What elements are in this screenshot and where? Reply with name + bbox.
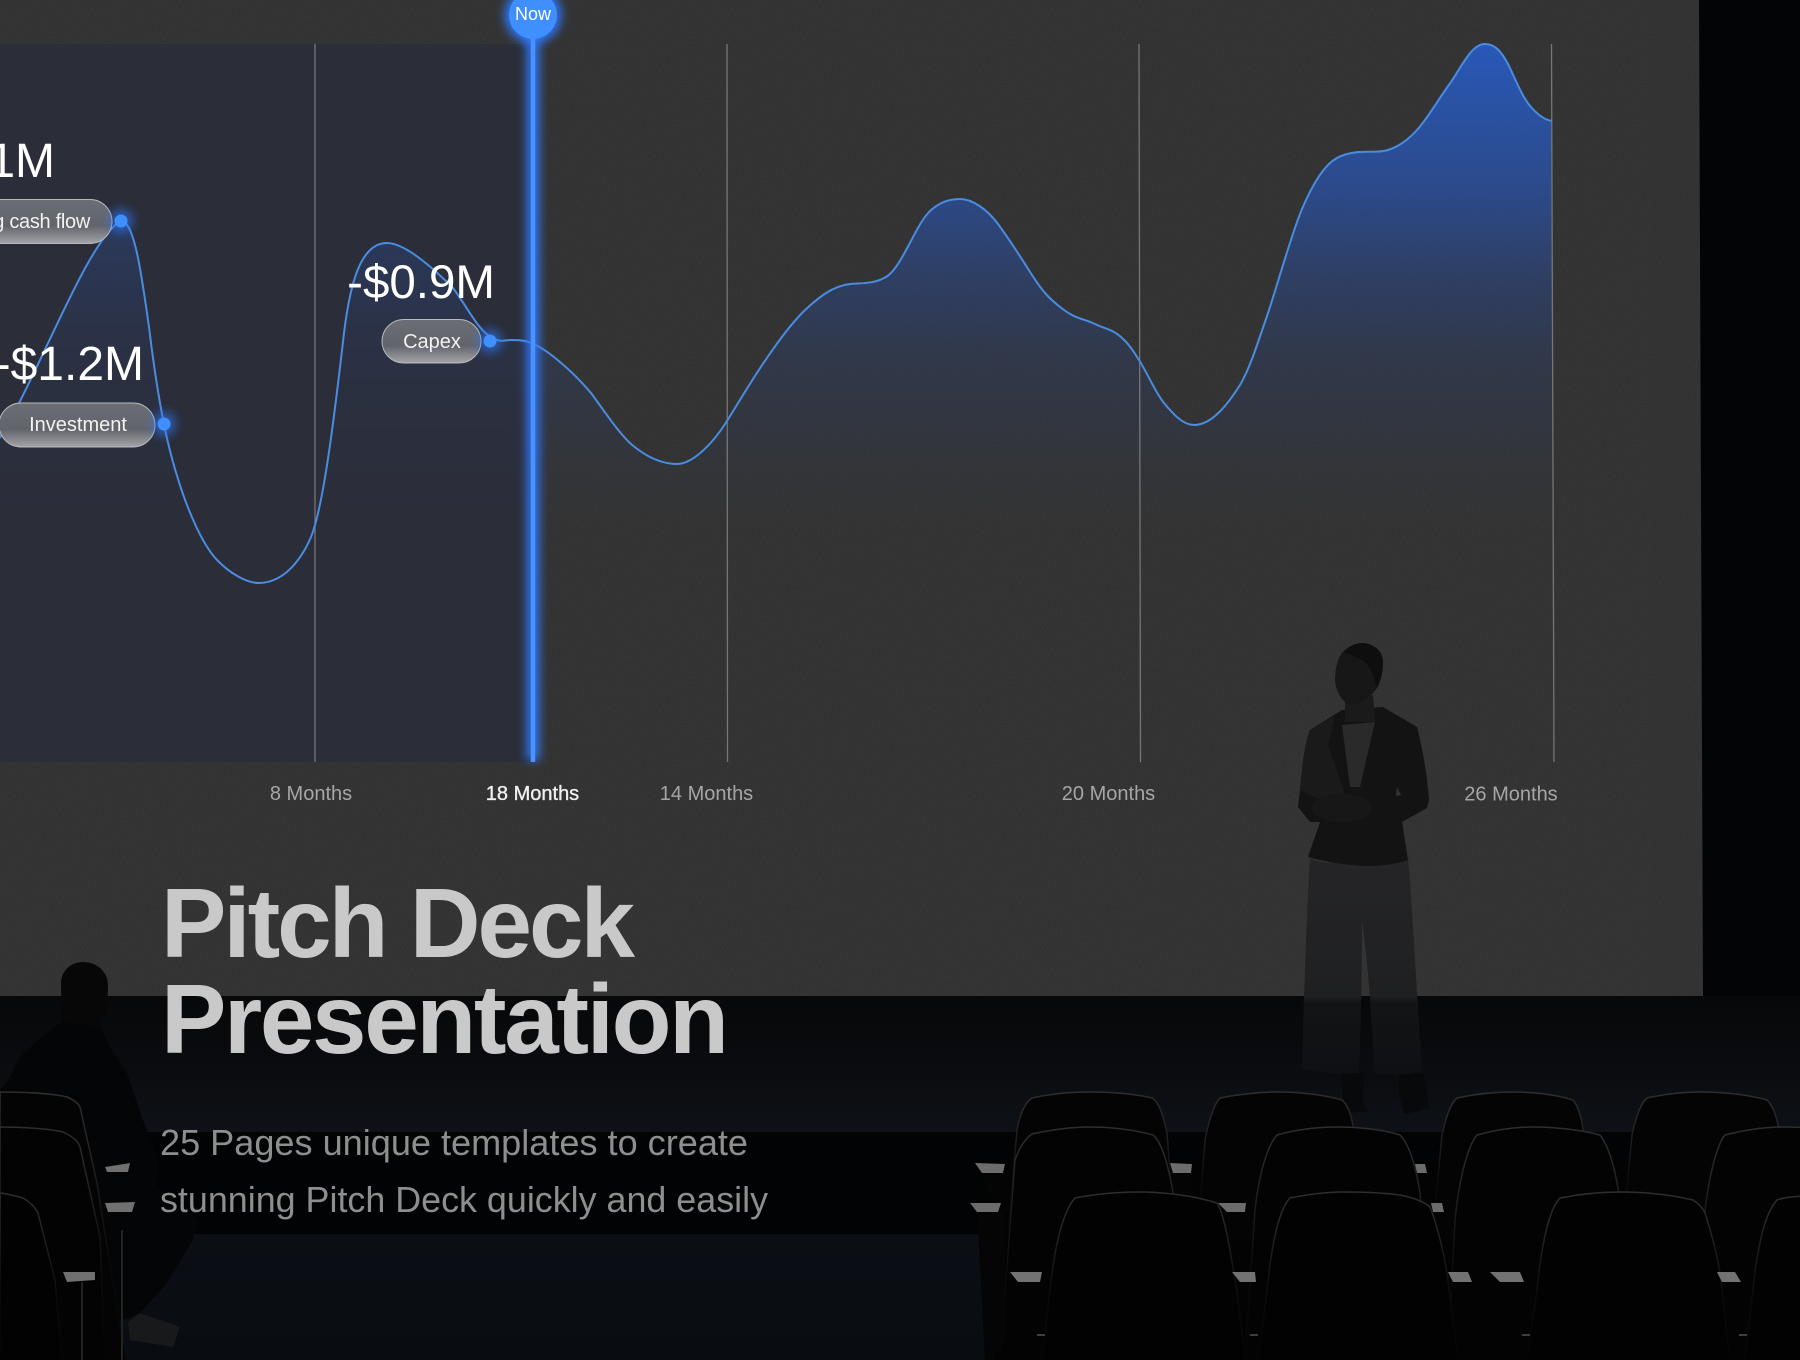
arm gap [1396, 787, 1401, 796]
shoes [1342, 1073, 1429, 1114]
jacket [1298, 707, 1429, 866]
head [61, 962, 108, 1030]
head [1335, 643, 1383, 705]
past period tinted panel [0, 44, 531, 762]
axis labels: 18 Months [486, 783, 579, 805]
armrests back [975, 1163, 1427, 1173]
callout: capex: Capex [403, 331, 461, 353]
seat row middle [1000, 1127, 1800, 1360]
seat row front [1042, 1192, 1800, 1360]
hands [1312, 794, 1372, 822]
title: Pitch Deck [161, 868, 635, 978]
callout: cash flow [0, 135, 133, 244]
arm supports back [982, 1173, 1190, 1210]
area fill left of now [26, 226, 525, 394]
neck [1345, 695, 1375, 722]
arm supports middle [977, 1212, 1005, 1360]
title [161, 868, 729, 1074]
axis labels: 26 Months [1464, 784, 1558, 806]
callout: investment [0, 338, 176, 447]
chart [0, 0, 1558, 806]
shoe [128, 1313, 180, 1347]
jacket highlight lapel and sleeve [1300, 716, 1345, 800]
subtitle [160, 1122, 768, 1220]
now marker: Now [515, 4, 552, 24]
hair [1343, 643, 1383, 688]
armrest glints [1037, 1334, 1747, 1336]
now marker [505, 0, 561, 762]
projection screen [0, 0, 1703, 996]
shirt [1342, 722, 1375, 787]
seat row back [1007, 1092, 1786, 1240]
callout: capex [347, 256, 502, 363]
seated audience member [0, 962, 198, 1347]
axis labels: 20 Months [1062, 783, 1155, 805]
left front seats [0, 1092, 135, 1360]
area fill right of now [531, 44, 1552, 560]
auditorium seats right [970, 1092, 1800, 1360]
armrests front [1010, 1272, 1741, 1282]
callout: capex: -$0.9M [347, 256, 495, 309]
trousers [1302, 858, 1422, 1075]
subtitle: 25 Pages unique templates to create [160, 1122, 748, 1163]
axis labels: 14 Months [660, 783, 753, 805]
callout: investment: Investment [29, 414, 127, 436]
subtitle: stunning Pitch Deck quickly and easily [160, 1179, 768, 1220]
title: Presentation [161, 964, 729, 1074]
armrests middle [970, 1203, 1444, 1212]
body and legs [0, 1022, 198, 1330]
presenter silhouette [1298, 643, 1429, 1114]
axis labels [270, 783, 1558, 806]
vertical grid lines [315, 44, 1554, 762]
axis labels: 8 Months [270, 783, 352, 805]
curve line [0, 44, 1552, 583]
